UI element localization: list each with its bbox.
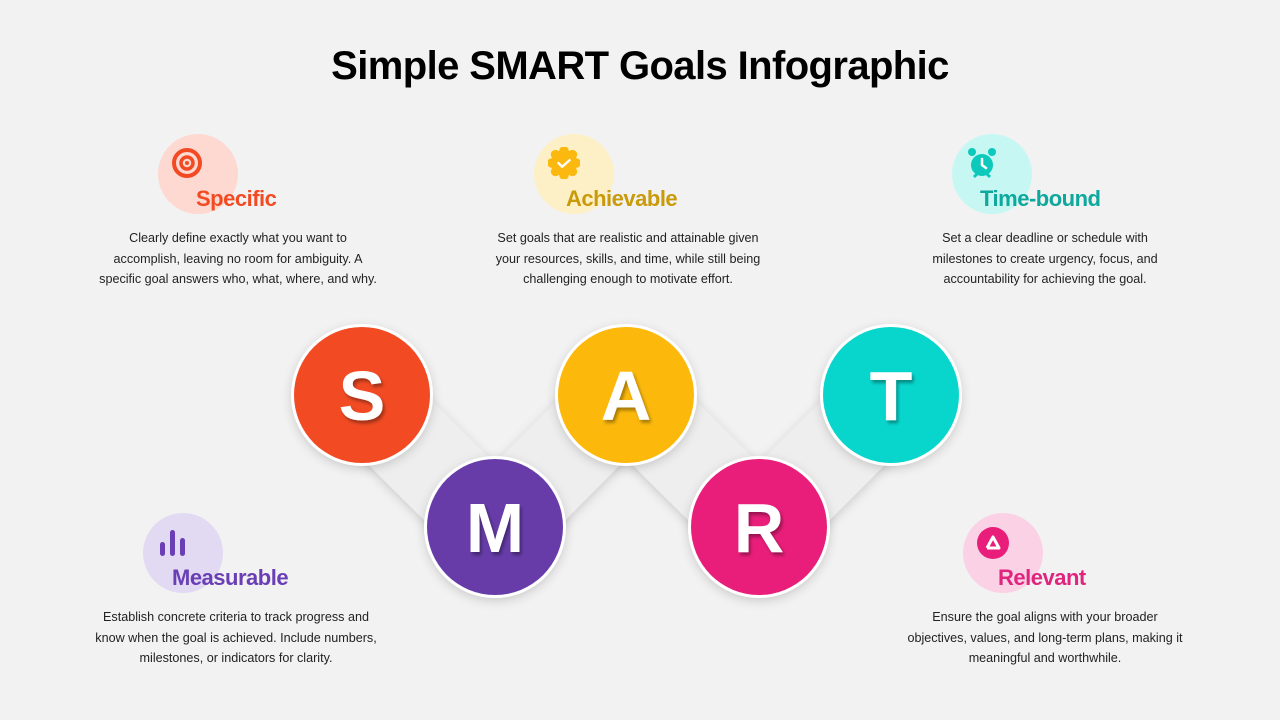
icon: bars xyxy=(143,513,223,593)
circle A: A xyxy=(601,357,651,435)
panel: achievable xyxy=(496,134,760,286)
icon: relevant xyxy=(963,513,1043,593)
heading: Specific xyxy=(196,186,276,211)
heading: Time-bound xyxy=(980,186,1100,211)
text: Establish concrete criteria to track progress and xyxy=(103,610,369,624)
panel: relevant xyxy=(907,513,1183,665)
heading: Measurable xyxy=(172,565,288,590)
icon: badge check xyxy=(534,134,614,214)
text: meaningful and worthwhile. xyxy=(969,651,1121,665)
circle M xyxy=(424,456,566,598)
circle R xyxy=(688,456,830,598)
circle M: M xyxy=(466,489,524,567)
circle T xyxy=(820,324,962,466)
text: your resources, skills, and time, while still being xyxy=(496,252,760,266)
circle S xyxy=(291,324,433,466)
text: know when the goal is achieved. Include numbers, xyxy=(95,630,377,644)
panel: time-bound xyxy=(932,134,1158,286)
heading: Relevant xyxy=(998,565,1086,590)
text: objectives, values, and long-term plans, making it xyxy=(907,630,1183,644)
text: accountability for achieving the goal. xyxy=(943,272,1147,286)
text xyxy=(95,610,377,665)
text: accomplish, leaving no room for ambiguity. A xyxy=(114,252,362,266)
icon: target xyxy=(158,134,238,214)
text: Ensure the goal aligns with your broader xyxy=(932,610,1158,624)
text: Set goals that are realistic and attainable given xyxy=(497,231,759,245)
panel: measurable xyxy=(95,513,377,665)
text xyxy=(907,610,1183,665)
heading: Achievable xyxy=(566,186,677,211)
icon: alarm clock xyxy=(952,134,1032,214)
text: challenging enough to motivate effort. xyxy=(523,272,733,286)
text: milestones to create urgency, focus, and xyxy=(932,252,1158,266)
text: specific goal answers who, what, where, and why. xyxy=(99,272,377,286)
text: Clearly define exactly what you want to xyxy=(129,231,347,245)
text: Set a clear deadline or schedule with xyxy=(942,231,1148,245)
circle T: T xyxy=(870,357,912,435)
text: milestones, or indicators for clarity. xyxy=(140,651,332,665)
text xyxy=(932,231,1158,286)
text xyxy=(99,231,377,286)
circle S: S xyxy=(339,357,385,435)
circle R: R xyxy=(734,489,784,567)
circle A xyxy=(555,324,697,466)
panel: specific xyxy=(99,134,377,286)
text xyxy=(496,231,760,286)
title: Simple SMART Goals Infographic xyxy=(331,44,949,88)
